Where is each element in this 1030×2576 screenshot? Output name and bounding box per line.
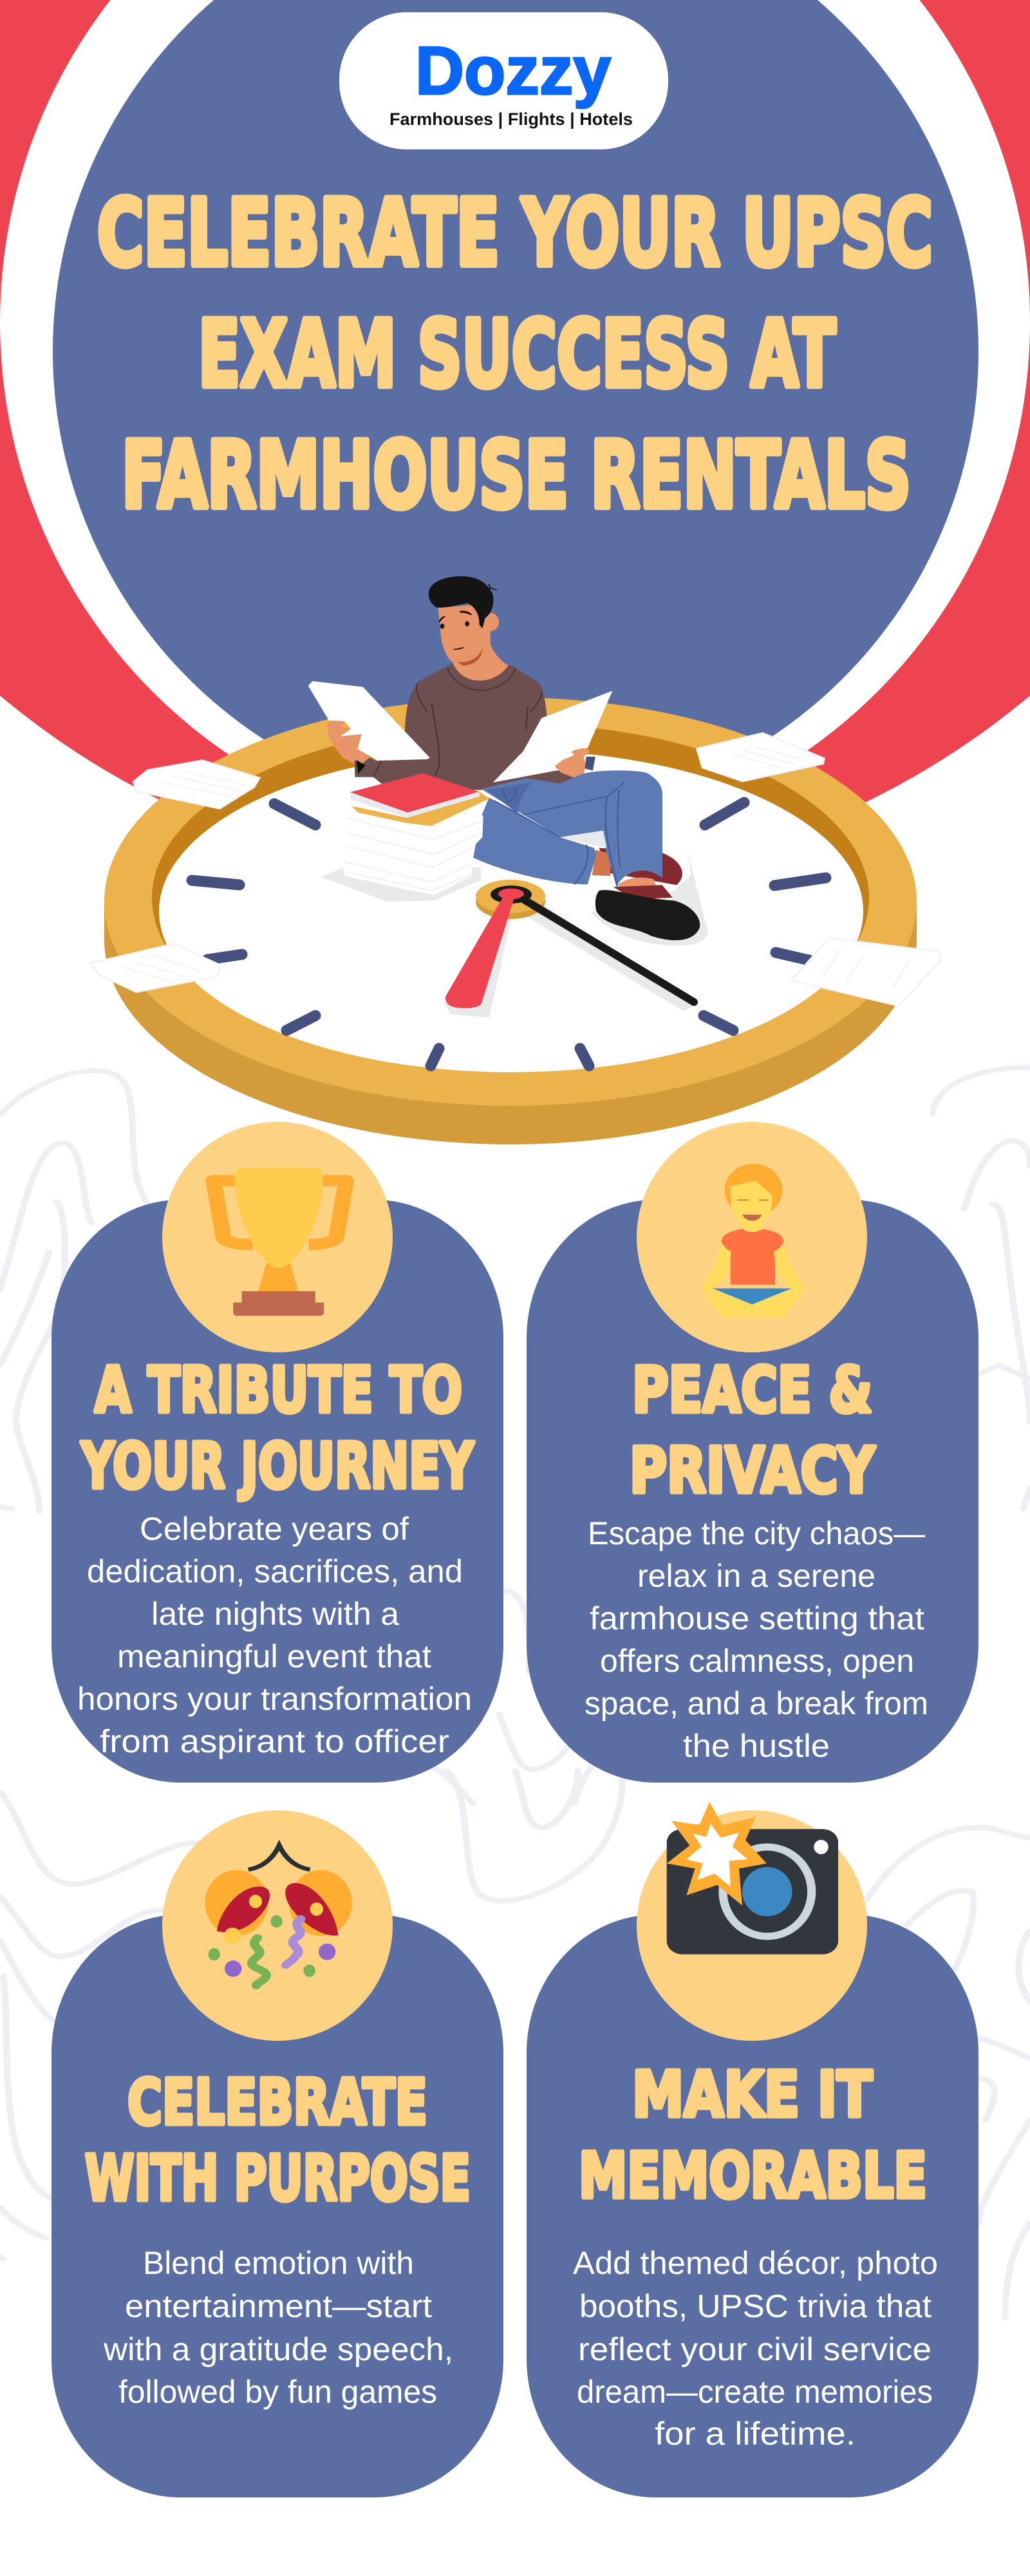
icon: camera with flash xyxy=(667,1802,838,1955)
red hour hand xyxy=(445,895,515,1009)
icon: party popper confetti xyxy=(205,1846,352,1985)
heading xyxy=(579,2058,927,2212)
body text: honors your transformation xyxy=(77,1681,472,1717)
front shoe upper xyxy=(613,885,673,900)
clock hub xyxy=(476,880,545,919)
heading: PEACE & xyxy=(632,1354,872,1426)
heading xyxy=(630,1354,876,1507)
body text: farmhouse setting that xyxy=(590,1600,924,1636)
body text xyxy=(585,1515,928,1764)
body text xyxy=(573,2245,938,2452)
hour ticks xyxy=(192,802,826,1066)
neck and face xyxy=(438,604,509,681)
shadow xyxy=(590,852,707,945)
logo tagline: Farmhouses | Flights | Hotels xyxy=(389,109,633,129)
body text: booths, UPSC trivia that xyxy=(579,2288,932,2324)
left paper xyxy=(308,681,430,761)
body text: space, and a break from xyxy=(585,1685,928,1721)
heading: PRIVACY xyxy=(630,1434,876,1507)
body text: Celebrate years of xyxy=(140,1511,409,1547)
body text: offers calmness, open xyxy=(600,1643,914,1679)
heading: MAKE IT xyxy=(632,2058,872,2131)
body text: dream—create memories xyxy=(577,2374,933,2410)
ear xyxy=(483,613,499,631)
left hand xyxy=(327,719,371,768)
black minute hand xyxy=(524,900,694,1002)
body text xyxy=(77,1511,472,1759)
body text: reflect your civil service xyxy=(578,2331,932,2367)
card: make it memorable xyxy=(527,1802,979,2497)
rear ankle xyxy=(592,850,610,876)
card: a tribute to your journey xyxy=(52,1122,503,1783)
jeans upper leg xyxy=(481,770,662,887)
white ring xyxy=(0,0,1030,842)
body text: dedication, sacrifices, and xyxy=(87,1553,463,1589)
icon badge xyxy=(637,1122,867,1352)
right paper xyxy=(493,691,612,782)
red background circle xyxy=(0,0,1030,883)
jeans shaded hip xyxy=(487,782,531,813)
heading: YOUR JOURNEY xyxy=(80,1430,474,1502)
loose papers on clock rim xyxy=(90,733,941,1006)
clock body xyxy=(104,697,917,1144)
logo badge xyxy=(339,12,668,149)
illustration: clock xyxy=(104,697,917,1144)
paper stack xyxy=(342,805,483,895)
icon: meditating person xyxy=(700,1164,805,1318)
rear shoe xyxy=(599,848,682,885)
jeans lower leg xyxy=(473,797,597,884)
man figure xyxy=(308,576,662,902)
sweater folds xyxy=(373,668,542,777)
heading xyxy=(80,1354,474,1502)
body text xyxy=(103,2245,453,2410)
heading xyxy=(85,2066,471,2215)
front ankle xyxy=(619,878,657,889)
body text: with a gratitude speech, xyxy=(103,2331,453,2367)
book xyxy=(350,791,480,818)
body text: from aspirant to officer xyxy=(100,1723,449,1759)
body text: meaningful event that xyxy=(117,1638,431,1674)
hand shadows xyxy=(444,898,694,1018)
body text: relax in a serene xyxy=(637,1558,876,1594)
icon badge xyxy=(162,1122,393,1352)
card: celebrate with purpose xyxy=(52,1810,503,2497)
body text: Blend emotion with xyxy=(143,2245,414,2281)
right hand and sleeve tip xyxy=(555,748,589,778)
icon badge xyxy=(162,1810,393,2041)
title xyxy=(97,180,933,529)
sweater xyxy=(355,663,584,790)
heading: MEMORABLE xyxy=(579,2139,927,2212)
logo wordmark: Dozzy xyxy=(415,33,611,109)
body text: followed by fun games xyxy=(118,2374,437,2410)
body text: Escape the city chaos— xyxy=(588,1515,925,1551)
left cuff xyxy=(356,760,366,774)
facial features xyxy=(438,611,472,650)
gap behind knee xyxy=(560,831,606,848)
body text: entertainment—start xyxy=(125,2288,432,2324)
stack lines xyxy=(344,818,482,891)
body text: late nights with a xyxy=(151,1596,399,1632)
stack shadow xyxy=(321,867,481,902)
folder xyxy=(352,791,489,826)
blue hero circle xyxy=(53,0,979,814)
body text: Add themed décor, photo xyxy=(573,2245,938,2281)
hair xyxy=(429,576,493,629)
body text: for a lifetime. xyxy=(655,2416,856,2452)
card: peace and privacy xyxy=(527,1122,979,1783)
front sole xyxy=(595,890,700,940)
chin shadow xyxy=(458,649,482,665)
body text: the hustle xyxy=(683,1728,830,1764)
heading: A TRIBUTE TO xyxy=(95,1354,462,1426)
man shoes and lower legs xyxy=(590,848,707,945)
heading: CELEBRATE xyxy=(127,2066,427,2139)
icon: trophy xyxy=(214,1168,346,1316)
heading: WITH PURPOSE xyxy=(85,2142,471,2215)
jeans seams xyxy=(494,782,624,887)
icon badge xyxy=(637,1810,867,2041)
